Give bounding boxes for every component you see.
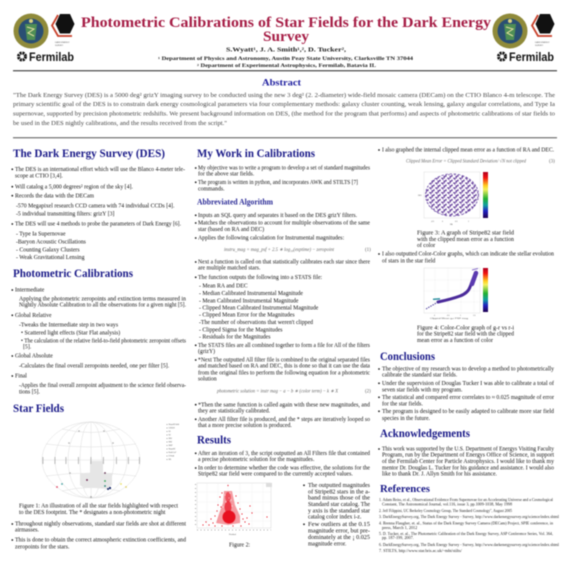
text block: iteration [195,401,370,429]
heading: Acknowledgements: Acknowledgements [380,426,470,440]
heading: Photometric Calibrations: Photometric Calibrations [13,266,133,280]
header logos: left [14,14,74,64]
figure 4 caption: Figure 4: Color-Color graph of g-r vs r-i [417,325,514,332]
text block: statistics output: - Clipped Mean Error for the Magnitudes [199,312,295,319]
icon: Fermilab logo right: Fermilab [509,52,554,64]
text block: results commentary: magnitude error, but pre- [308,528,370,534]
text block: references: 2. Jeff Filippini, UC Berkeley Cosmology Group, The Standard Cosmology", August 2005 [379,508,512,514]
text block: algorithm steps: star (based on RA and DEC) [198,226,264,233]
chart: figure 3 stripe82 field: -0.5 [431,221,434,223]
icon: DES hexagon: DARK ENERGY [55,41,70,44]
text block: statistics output: Next a function is called on that statistically calibrates each star since there [198,259,370,266]
chart legend: SN1 [168,438,172,440]
figure 1 caption: Figure 1: An illustration of all the star fields highlighted with respect [19,503,178,510]
text block: DES bullets: scope at CTIO [3,4]. [15,173,63,179]
chart: figure 4 color-color [424,268,488,320]
panel: right column [378,147,560,554]
chart: figure 4 color-color: 1.5 [473,315,476,317]
text block: acknowledgements: mentor Dr. Douglas L. Tucker for his guidance and assistance. I would also [382,464,554,471]
equation 1: (1) [365,248,371,253]
text block: results: Stripe82 star field were compared to the currently accepted values. [198,471,353,478]
text block: conclusions: The program is designed to be easily adapted to calibrate more star field [382,408,554,415]
title: Photometric Calibrations of Star Fields for the Dark Energy [81,15,492,31]
abstract text: "The Dark Energy Survey (DES) is a 5000 deg² grizY imaging survey to be conducted using the new 3 deg² (2. 2-diameter) wide-field mosaic camera (DECam) on the CTIO Blanco 4-m telescope. The [13,92,555,99]
text block: conclusions: for the star fields. [382,400,423,407]
text block: objective: commands. [198,186,225,192]
text block: calibration steps: Global Relative [15,313,52,319]
chart: figure 3 stripe82 field: 1 [468,221,469,223]
figure 3 caption: with the clipped mean error as a function [417,236,514,243]
figure 2 caption: Figure 2: [229,543,250,549]
equation 1: instru_mag = mag_psf + 2.5 ∗ log₁₀(exptime) − zeropoint [224,247,335,253]
text block: objective: My objective was to write a program to develop a set of standard magnitudes [198,165,371,172]
text block: results: After an iteration of 3, the script outputted an All Filters file that contained [198,450,370,457]
text block: DES bullets: The DES will use 4 methods to probe the parameters of Dark Energy [6]. [15,221,182,228]
text block: results commentary: band minus those of the [308,495,370,502]
abstract [13,78,555,127]
text block: star field bullets: This is done to obtain the correct atmospheric extinction coefficients, and [15,537,186,544]
chart: figure 4 color-color: 0.5 [447,315,450,317]
DES footprint [80,461,112,488]
text block: calibration steps: Nightly Absolute Calibration to all the observations for a given night [5]. [19,302,187,309]
text block: statistics output [195,259,371,383]
text block: color-color: of stars in the star field [382,257,435,264]
text block: statistics output: *Next The outputted All filter file is combined to the original separated files [198,357,371,364]
text block: conclusions: Under the supervision of Douglas Tucker I was able to calibrate a total of [382,380,554,387]
text block: iteration: they are statistically calibrated. [198,408,271,414]
heading: My Work in Calibrations: My Work in Calibrations [197,146,315,160]
text block: results [195,450,370,478]
chart: figure 2 residual scatter [196,483,272,536]
text block: objective [195,165,371,192]
icon: DES hexagon right [532,14,554,47]
equation 3: (3) [549,159,555,164]
panel: middle column [195,146,371,549]
header logos: right [492,14,554,64]
text block: results commentary: catalog color index i-z. [308,514,362,520]
text block: algorithm steps: Matches the observations to account for multiple observations of the same [198,220,370,227]
text block: results commentary: y axis is the standard star [308,508,370,514]
heading: References: References [380,483,431,495]
figure 4 caption: mean error as a function of color [417,337,493,344]
text block: star field bullets [11,521,186,550]
text block: results: a precise photometric solution for the magnitudes. [198,456,315,463]
text block: conclusions [378,366,554,422]
abstract text: primary scientific goal of the DES is to constrain dark energy cosmological parameters via four complementary methods: galaxy cluster counting, weak lensing, galaxy angular correlations, and Type Ia [13,101,555,108]
text block: star field bullets: airmasses. [15,528,40,534]
text block: statistics output: are multiple matched stars. [198,266,261,272]
text block: DES bullets: -570 Megapixel research CCD camera with 74 individual CCDs [4]. [16,203,175,209]
chart: sky map of star fields [42,422,140,498]
text block: calibration steps: • Scattered light effects (Star Flat analysis) [21,329,120,336]
text block: conclusions: calibrate the standard star fields. [382,372,458,379]
text block: references: 4. Brenna Flaugher, et. al., Status of the Dark Energy Survey Camera (DECam) Project, SPIE conference, in [379,520,554,526]
text block: DES bullets: - Type Ia Supernovae [16,231,66,237]
text block: acknowledgements: This work was supported by the U.S. Department of Energys Visiting Faculty [382,446,554,453]
text block: DES bullets [11,166,185,261]
text block: references: pp. 187-199, 2007. [382,535,414,541]
title: Survey [263,29,310,45]
text block: statistics output: from the original files to perform the following equation for a photometric [198,369,370,376]
text block: calibration steps: Global Absolute [15,354,53,360]
chart: figure 3 stripe82 field: 0.5 [455,221,458,223]
text block: acknowledgements: of the Fermilab Center for Particle Astrophysics. I would like to thank my [382,458,554,465]
chart: figure 4 color-color: Clipped Mean g-r PSF mag [430,318,468,320]
text block: objective: The program is written in python, and incorporates AWK and STILTS [7] [198,180,358,186]
heading: The Dark Energy Survey: The Dark Energy Survey (DES) [13,146,165,160]
text block: statistics output: - Mean Calibrated Instrumental Magnitude [199,298,299,304]
text block: results: In order to determine whether the code was effective, the solutions for the [198,465,370,472]
affiliations [158,56,414,69]
affiliations: ² Department of Experimental Astrophysics, Fermilab, Batavia IL [197,63,376,69]
text block: statistics output: (grizY) [198,348,215,355]
text block: calibration steps: -Tweaks the Intermediate step in two ways [19,322,119,328]
text block: acknowledgements: like to thank Dr. J. Allyn Smith for his assistance. [382,471,498,478]
text block: statistics output: The STATS files are all combined together to form a file for All of the filters [198,342,371,349]
text block: calibration steps: • The calculation of the relative field-to-field photometric zeropoint offsets [21,337,187,344]
text block: references [379,497,560,554]
figure 3 caption: Figure 3: A graph of Stripe82 star field [417,229,514,236]
abstract text: supernovae, supported by precision photometric redshifts. We present background information on DES, (the method for the program that performs) and aspects of photometric calibrations of star fields to [13,110,555,118]
text block: calibration steps: tions [5]. [19,390,40,396]
heading: Star Fields: Star Fields [13,401,64,415]
equation 2: photometric solution = instr mag − a − b ∗ (color term) − k ∗ X [216,389,339,395]
text block: algorithm steps: Inputs an SQL query and separates it based on the DES grizY filters. [198,212,358,219]
figure 3 caption [417,229,514,249]
text block: statistics output: - Residuals for the Magnitudes [199,334,271,341]
text block: statistics output: - Clipped Sigma for the Magnitudes [199,326,283,333]
equation 2: (2) [365,390,371,395]
text block: clipped mean error: I also graphed the internal clipped mean error as a function of RA and DEC. [382,147,555,154]
chart legend: SN [168,459,172,461]
icon: DES hexagon [52,14,74,47]
text block: calibration steps: Intermediate [15,288,45,294]
text block: DES bullets: -5 individual transmitting filters: grizY [3] [16,211,115,218]
chart: figure 3 stripe82 field [418,172,488,226]
text block: conclusions: seven star fields with my program. [382,386,463,393]
title [81,15,492,45]
text block: color-color [378,252,554,264]
icon: DES hexagon: SURVEY [55,45,64,47]
chart: figure 2 residual scatter: Residual [229,534,237,536]
subheading: Abbreviated Algorithm: Abbreviated Algorithm [197,196,274,206]
text block: DES bullets: The DES is an international effort which will use the Blanco 4-meter tele- [15,166,185,173]
figure 3 caption: of color [417,242,435,249]
text block: DES bullets: - Weak Gravitational Lensing [16,255,85,261]
figure 1 caption: to the DES footprint. The * designates a non-photometric night [19,509,166,516]
text block: statistics output: - Mean RA and DEC [199,284,248,290]
chart: figure 3 stripe82 field: DEC [418,195,422,197]
figure 4 caption [417,325,514,344]
text block: DES bullets: -Baryon Acoustic Oscillations [16,239,87,245]
icon: Fermilab logo: Fermilab [29,52,74,64]
text block: iteration: that a more precise solution is produced. [198,423,292,429]
icon: DOE seal [14,14,48,48]
text block: conclusions: species in the future. [382,415,431,422]
text block: algorithm steps [195,212,370,242]
icon: DES hexagon right: SURVEY [535,45,544,47]
abstract text: be used in the DES nightly calibrations, and the results received from the script." [13,120,227,127]
text block: statistics output: The function outputs the following into a STATS file: [198,274,323,281]
text block: acknowledgements [378,446,554,478]
chart legend [166,423,179,461]
heading: Conclusions: Conclusions [380,349,435,363]
text block: statistics output: solution [198,377,217,383]
figure 1 caption [19,503,178,516]
chart legend: S2 [168,434,171,436]
heading: Results: Results [197,432,231,446]
text block: algorithm steps: Applies the following calculation for Instrumental magnitudes: [198,235,345,242]
chart legend: C26202 [168,428,175,430]
text block: references: 7. STILTS, http://www.star.bris.ac.uk/~mbt/stilts/ [379,548,463,554]
panel: left column [11,146,187,550]
text block: calibration steps: -Calculates the final overall zeropoints needed, one per filter [5]. [19,363,170,370]
affiliations: ¹ Department of Physics and Astronomy, Austin Peay State University, Clarksville TN 37044 [158,56,414,62]
icon: DES hexagon right: DARK ENERGY [535,41,550,44]
abstract heading: Abstract [262,78,301,88]
chart legend: Field Cal* [168,452,177,454]
text block: references: 5. D. Tucker, et. al., The Photometric Calibration of the Dark Energy Survey, ASP Conference Series, Vol. 364, [379,531,553,537]
text block: iteration: *Then the same function is called again with these new magnitudes, and [198,401,370,408]
chart: figure 4 color-color: 0 [434,315,435,317]
text block: results commentary: Few outliers at the 0.15 [308,522,370,528]
chart: figure 3 stripe82 field: RA [450,223,453,226]
text block: calibration steps [11,288,187,396]
text block: references: Constant, The Astronomical Journal, vol.116, issue 3, pp.1009-1038, May 1998 [382,502,512,508]
equation 1 [224,247,371,253]
chart: figure 4 color-color: 1 [460,315,461,317]
chart legend: X Field [168,456,174,458]
text block: calibration steps: -Applies the final overall zeropoint adjustment to the science field observa- [19,382,186,389]
text block: results commentary [303,483,371,547]
text block: results commentary: of Stripe82 stars in the a- [308,489,370,496]
text block: star field bullets: zeropoints for the stars. [15,543,70,550]
text block: DES bullets: - Counting Galaxy Clusters [16,247,80,253]
figure 4 caption: for the Stripe82 star field with the clipped [417,331,514,338]
text block: results commentary: Standard star catalog. The [308,502,370,508]
text block: references: press, March 1, 2012 [382,525,417,531]
text block: statistics output: and matched based on RA and DEC, this is done so that it can use the data [198,364,370,370]
text block: results commentary: The outputted magnitudes [308,483,371,489]
chart legend: SN3* [168,445,173,447]
text block: star field bullets: Throughout nightly observations, standard star fields are shot at different [15,521,186,528]
equation 3: Clipped Mean Error = Clipped Standard Deviation/ √N not clipped [406,158,526,164]
text block: objective: for the above star fields. [198,171,255,178]
text block: color-color: I also outputted Color-Color graphs, which can indicate the stellar evolution [382,252,554,258]
authors: S.Wyatt¹, J. A. Smith¹,², D. Tucker², [226,48,347,54]
text block: calibration steps: [5]. [23,344,32,350]
text block: calibration steps: Final [15,374,27,380]
text block: statistics output: - Median Calibrated Instrumental Magnitude [199,291,303,297]
chart legend: SN2 [168,442,172,444]
text block: iteration: Another All filter file is produced, and the * steps are iteratively looped so [198,416,370,423]
chart legend: Stripe82 field [168,423,179,426]
chart legend: S1 [168,431,171,433]
text block: results commentary: dominately at the ¡ 0.025 [308,535,370,541]
text block: DES bullets: Will catalog a 5,000 degrees² region of the sky [4]. [15,183,133,190]
icon: DOE seal right [492,14,528,48]
chart: figure 3 stripe82 field: 0 [442,221,443,223]
text block: conclusions: The statistical and compared error correlates to ≈ 0.025 magnitude of error [382,394,554,401]
text block: results commentary: magnitude error. [308,541,347,547]
abstract text [13,92,555,127]
text block: conclusions: The objective of my research was to develop a method to photometrically [382,366,554,373]
text block: acknowledgements: Program, run by the Department of Energys Office of Science, in support [382,452,554,459]
text block: DES bullets: Records the data with the DECam [15,193,95,199]
text block: calibration steps: Applying the photometric zeropoints and extinction terms measured in [19,297,186,303]
text block: statistics output: - Clipped Mean Calibrated Instrumental Magnitude [199,305,319,311]
chart legend: Stripe82 [168,448,175,450]
text block: statistics output: -The number of observations that weren't clipped [199,319,313,326]
